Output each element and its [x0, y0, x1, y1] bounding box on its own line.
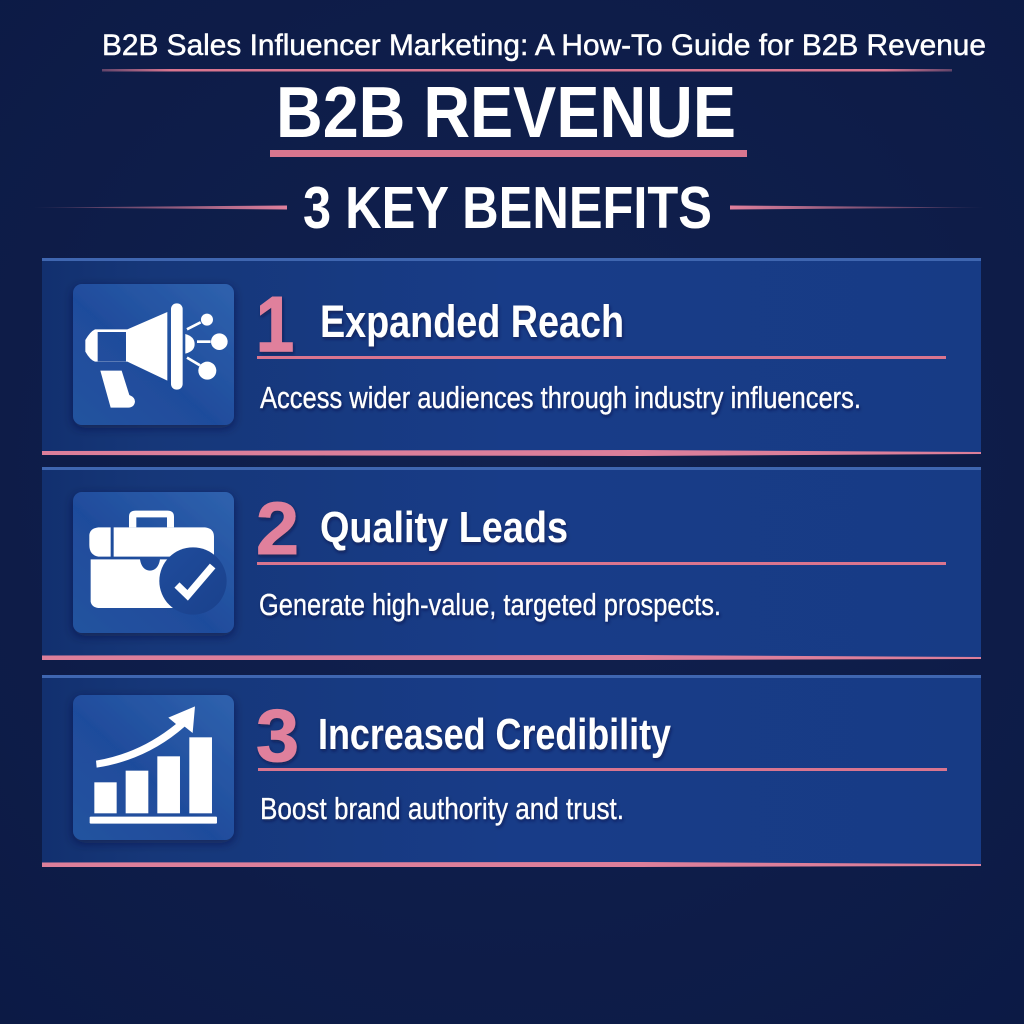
top title: B2B Sales Influencer Marketing: A How-To Guide for B2B Revenue: [102, 29, 986, 62]
number 1: 1: [256, 280, 294, 368]
heading: B2B Revenue: B2B REVENUE: [276, 73, 736, 153]
benefit description: Boost brand authority and trust.: [260, 791, 624, 826]
heading: 3 Key Benefits: 3 KEY BENEFITS: [303, 175, 712, 241]
benefit title: Expanded Reach: [320, 296, 624, 347]
panel: quality leads: [42, 467, 981, 660]
icon: briefcase with check: [73, 492, 234, 633]
number 2: 2: [256, 487, 299, 570]
icon: rising bar chart: [73, 695, 234, 840]
benefit title: Increased Credibility: [318, 710, 671, 759]
benefit description: Generate high-value, targeted prospects.: [259, 587, 721, 622]
icon: megaphone with network nodes: [73, 284, 234, 425]
heading: 3 Key Benefits: [32, 175, 985, 241]
panel: increased credibility: [42, 675, 981, 867]
number 3: 3: [256, 694, 299, 777]
benefit title: Quality Leads: [320, 503, 568, 552]
panel: expanded reach: [42, 258, 981, 456]
benefit description: Access wider audiences through industry influencers.: [260, 380, 861, 415]
